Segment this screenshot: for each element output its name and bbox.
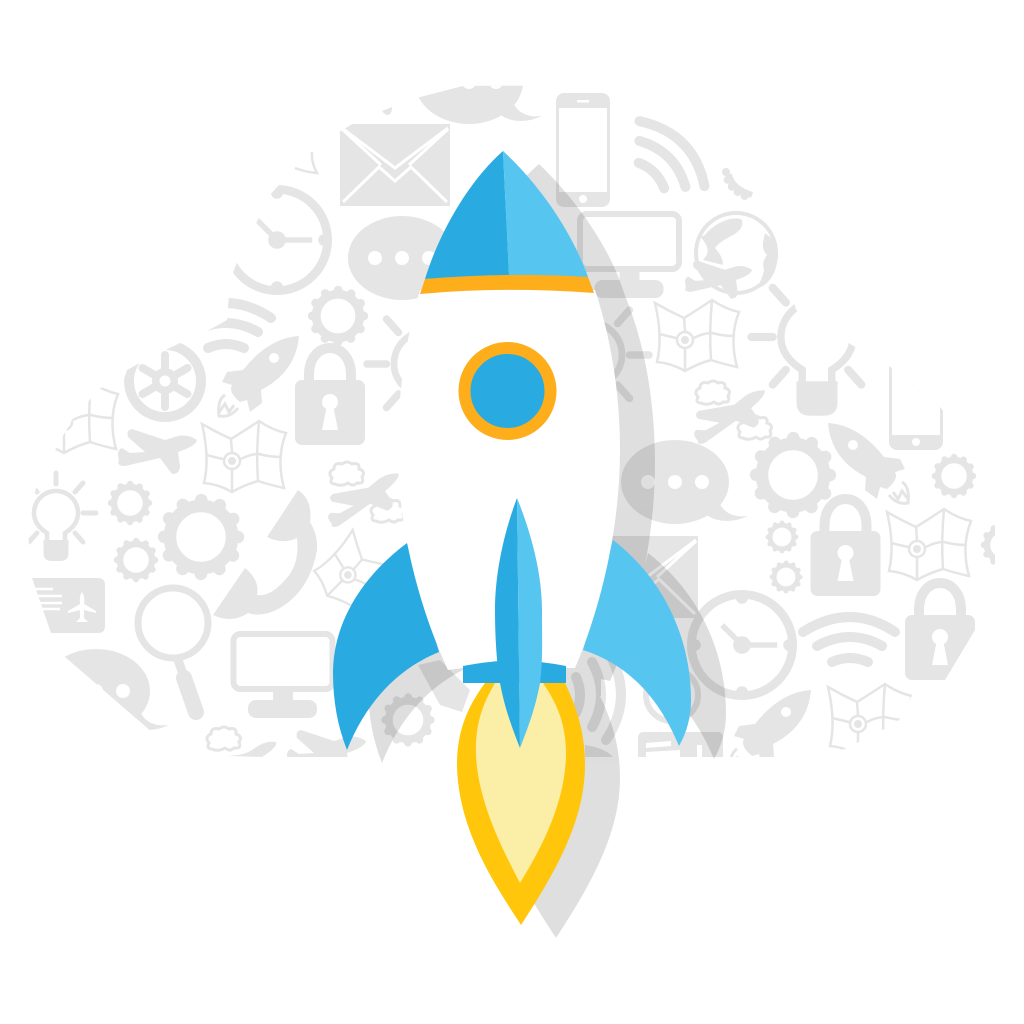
icon: wifi left: [179, 303, 271, 348]
icon: envelope: [340, 124, 450, 206]
icon: clouds and plane center-left: [328, 460, 404, 527]
icon: speech bubble top clipped: [419, 86, 542, 124]
icon: bulb upper right: [748, 284, 866, 416]
icon: envelope centre right: [588, 536, 698, 618]
icon: clipped envelope bottom right: [638, 732, 723, 757]
icon: ring behind right fin: [646, 669, 698, 721]
icon: gear small left bottom: [117, 541, 155, 579]
flame: inner: [476, 683, 566, 883]
icon: lock far right: [905, 583, 975, 680]
icon: monitor lower left: [234, 634, 332, 718]
icon: map upper right: [655, 300, 739, 371]
icon cloud background: [16, 40, 1022, 775]
icon: gear small left top: [111, 484, 149, 522]
rocket: body: [398, 290, 620, 670]
icon: rocket right: [828, 423, 908, 503]
icon: clock top left: [224, 187, 330, 293]
icon: plane with clouds right: [694, 380, 773, 444]
rocket: centre fin right: [517, 498, 542, 748]
icon: plane over globe: [685, 260, 752, 299]
illustration: rocket launching from icon cloud: [28, 86, 995, 938]
rocket: nose left: [425, 151, 509, 279]
icon: handset fragment behind rocket: [418, 660, 470, 712]
icon: gear upper left: [312, 290, 364, 342]
icon: map far right: [887, 509, 971, 580]
icon: clipped plane bottom: [287, 730, 366, 757]
icon: speedy plane box: [32, 578, 105, 633]
icon: monitor top: [580, 214, 679, 298]
rocket: porthole: [464, 348, 550, 434]
icon: small fragment above envelope: [382, 107, 392, 115]
icon: rocket lower right: [731, 690, 811, 770]
icon: gear fragment top right: [726, 172, 752, 198]
icon: globe: [696, 213, 778, 293]
icon: phone: [556, 93, 610, 207]
icon: map fragment top left: [295, 152, 317, 173]
icon: wheel: [129, 345, 201, 417]
icon: small map far left: [55, 388, 120, 454]
icon: gear big left: [164, 500, 238, 574]
icon: map center-left: [312, 528, 384, 606]
icon: lock left: [295, 348, 365, 445]
icon: speech bubble top: [348, 216, 444, 300]
icon: phone right: [889, 336, 943, 450]
flame: outer: [457, 683, 585, 925]
icon: gear small right: [935, 457, 973, 495]
icon: cloud bottom left: [207, 727, 240, 750]
icon: telephone handset: [213, 490, 317, 619]
icon: wifi top right: [634, 116, 710, 194]
icon: gear big right: [756, 438, 830, 512]
rocket: crossbar: [463, 660, 566, 683]
icon: lock right: [810, 499, 880, 596]
icon: speech bubble centre right: [621, 440, 748, 524]
icon: gears small cluster right: [768, 523, 1022, 591]
rocket: orange band: [420, 275, 594, 294]
icon: magnifier: [138, 588, 208, 712]
rocket: nose right: [503, 151, 588, 277]
icon: wifi behind flame: [576, 648, 621, 740]
rocket: [333, 151, 691, 925]
icon: speech bubble lower left: [65, 649, 168, 730]
rocket: left fin: [333, 543, 439, 750]
icon: map left: [202, 421, 286, 492]
icon: small rocket left: [219, 336, 299, 416]
icon: plane left: [118, 429, 197, 474]
icon: clock lower right: [689, 592, 795, 698]
icon: wifi lower right: [803, 617, 895, 662]
rocket: right fin: [583, 540, 691, 746]
icon: map lower right: [828, 684, 912, 755]
rocket: centre fin left: [495, 498, 520, 748]
icon: bulb center right: [604, 306, 653, 402]
icon: bulb center-left: [363, 315, 410, 412]
rocket shadow: [368, 164, 726, 938]
icon: clipped wing behind flame: [585, 745, 613, 757]
icon: bulb far left: [28, 470, 98, 561]
icon: clipped wing bottom: [227, 742, 276, 757]
icon: gear bottom centre: [385, 697, 431, 743]
